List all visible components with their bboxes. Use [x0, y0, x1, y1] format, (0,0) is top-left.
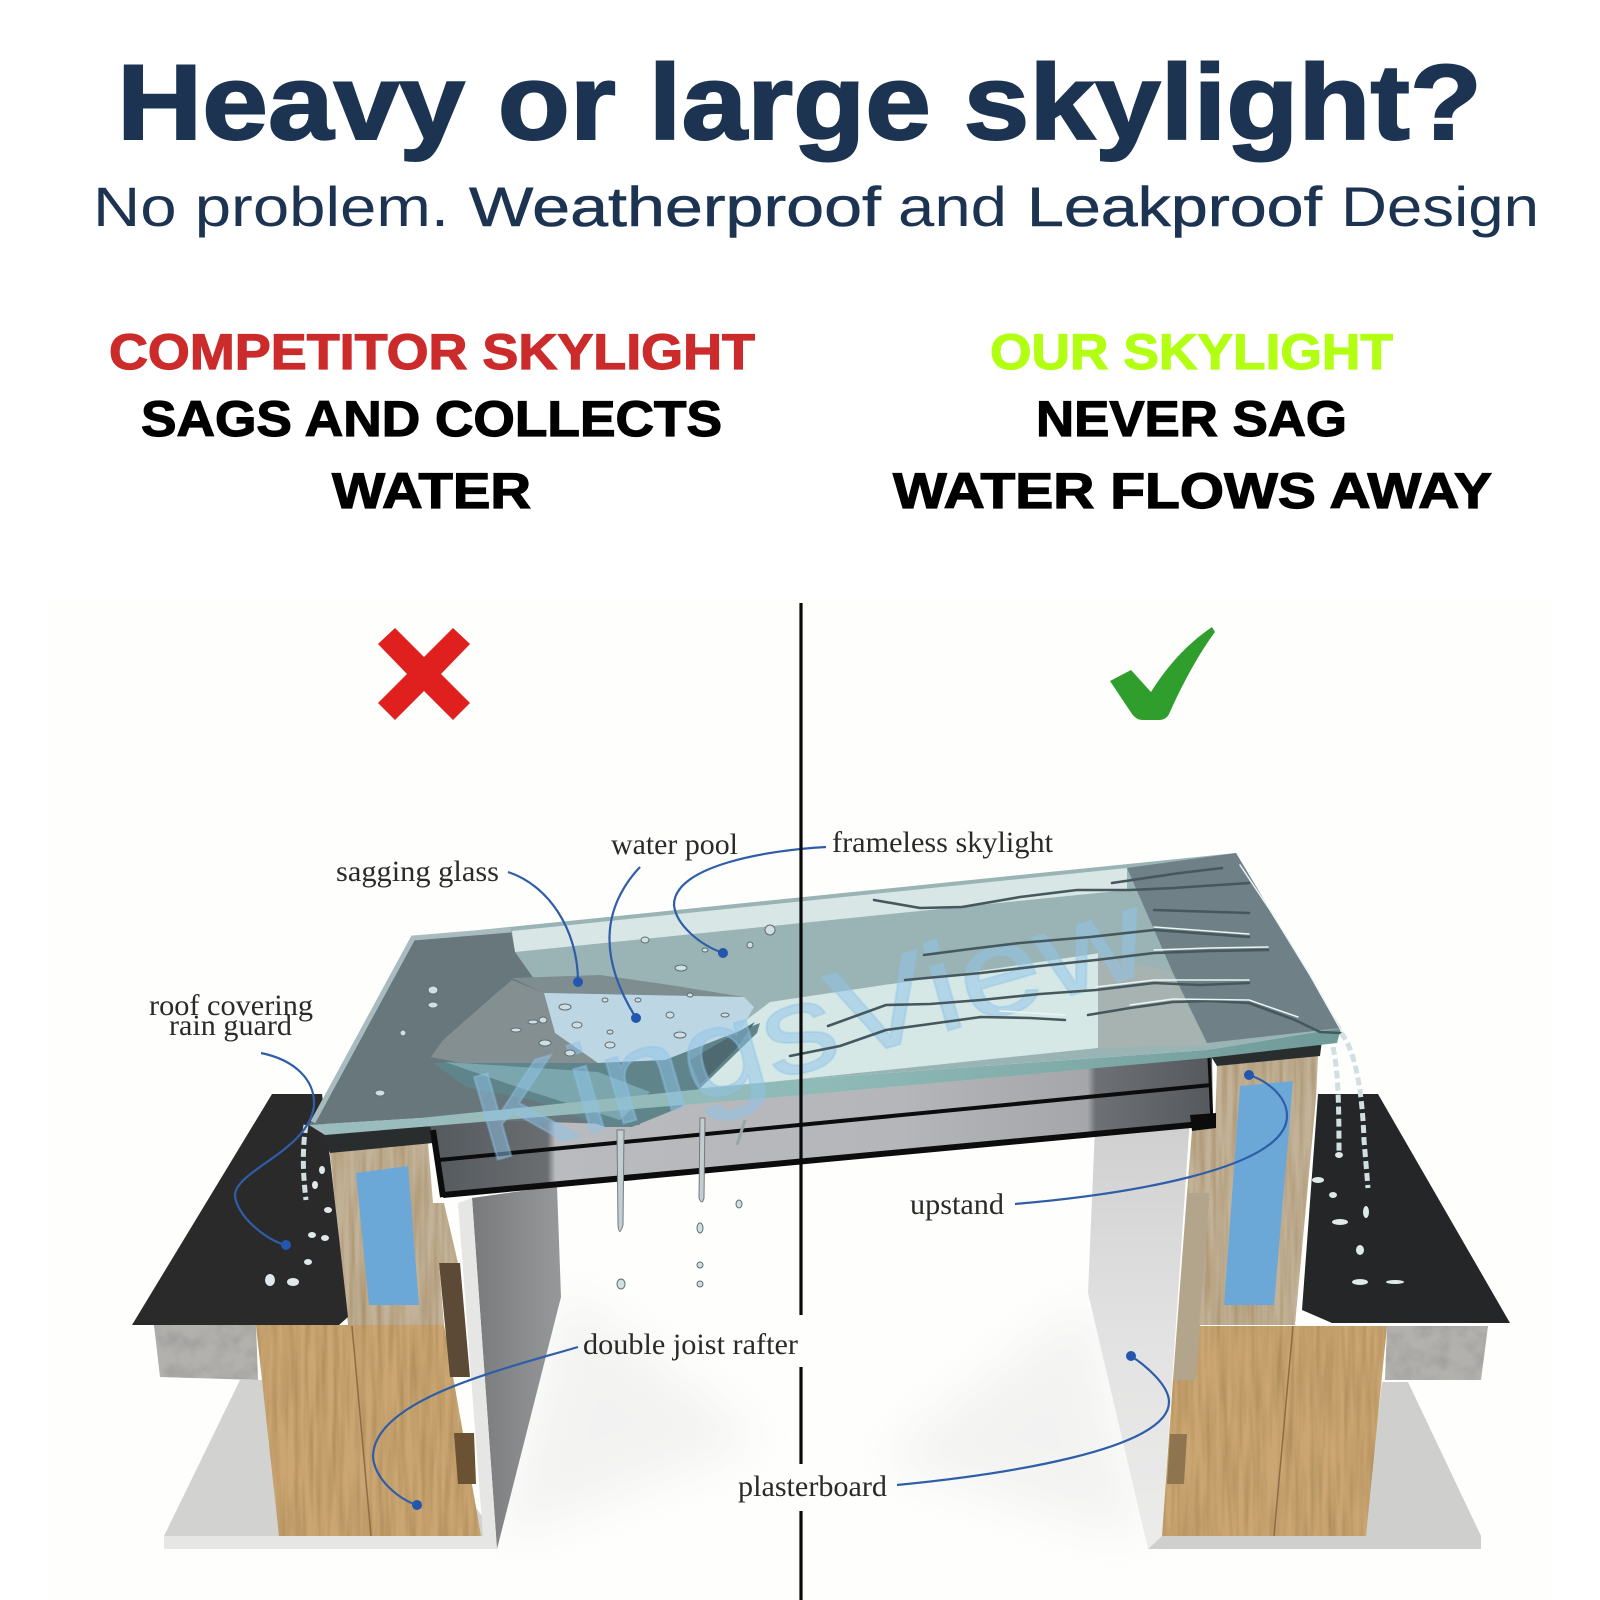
- back glass band: [512, 868, 1127, 952]
- label: roof covering rain guard: roof covering: [149, 989, 313, 1022]
- right dark panel: [1127, 853, 1341, 1043]
- transition strip: [1098, 953, 1207, 1048]
- heading: our skylight: WATER FLOWS AWAY: [893, 463, 1492, 519]
- floor shadows: [500, 1290, 1140, 1540]
- left joist divider: [352, 1326, 371, 1536]
- black pane lines: [433, 1058, 1216, 1197]
- glass droplets: [375, 925, 775, 1096]
- heading: our skylight: NEVER SAG: [1036, 391, 1347, 447]
- subtitle: No problem.: [93, 175, 449, 238]
- heading: our skylight: [893, 324, 1492, 519]
- label: double joist rafter: double joist rafter: [583, 1328, 798, 1361]
- label: frameless skylight: [674, 826, 1054, 958]
- right floor plate: [1148, 1382, 1481, 1549]
- label: roof covering rain guard: rain guard: [169, 1009, 292, 1042]
- right joist rafter: [1162, 1326, 1387, 1536]
- label: sagging glass: [336, 855, 583, 987]
- label: upstand: upstand: [910, 1188, 1004, 1221]
- label: water pool: water pool: [611, 828, 738, 861]
- right roof waterfall: [1312, 1033, 1404, 1285]
- subtitle: and: [898, 175, 1007, 238]
- skylight cross-section diagram: [132, 826, 1510, 1549]
- left dark panel: [309, 930, 640, 1125]
- subtitle: Design: [1341, 175, 1539, 238]
- left dark gap above upstand: [322, 1126, 433, 1153]
- sagging water pool: [431, 975, 760, 1127]
- subtitle: [93, 175, 1539, 238]
- right wall: [1088, 1118, 1190, 1549]
- heading: our skylight: OUR SKYLIGHT: [990, 324, 1393, 380]
- lower light surface: [660, 953, 1100, 1092]
- subtitle: Weatherproof: [469, 175, 882, 238]
- icon: red cross: [378, 628, 470, 720]
- label: plasterboard: plasterboard: [738, 1470, 887, 1503]
- left floor plate: [164, 1380, 497, 1549]
- heading: competitor skylight: [109, 324, 755, 519]
- left gray wall: [472, 1186, 561, 1549]
- heading: competitor skylight: WATER: [332, 463, 531, 519]
- right insulation: [1224, 1081, 1293, 1305]
- label: roof covering rain guard: [149, 989, 314, 1250]
- subtitle: Leakproof: [1027, 175, 1323, 238]
- label: water pool: [609, 828, 738, 1023]
- left concrete: [154, 1325, 258, 1380]
- glass front edge: [309, 1028, 1341, 1135]
- glass underside: [430, 1055, 1213, 1193]
- water streaks: [790, 865, 1341, 1056]
- comparison divider line: [799, 603, 803, 1600]
- label: upstand: [910, 1070, 1287, 1221]
- glass bevel edge: [313, 930, 511, 1122]
- right lower notch: [1167, 1434, 1187, 1484]
- watermark: KingsView: [455, 864, 1162, 1189]
- right upstand timber: [1187, 1056, 1318, 1325]
- right upper notch: [1173, 1193, 1210, 1380]
- left upper notch: [439, 1263, 470, 1377]
- left insulation: [356, 1166, 419, 1305]
- drips under sagging glass: [617, 1118, 745, 1289]
- left upstand timber: [330, 1143, 458, 1325]
- heading: competitor skylight: COMPETITOR SKYLIGHT: [109, 324, 755, 380]
- title: Heavy or large skylight?: [117, 42, 1482, 162]
- right concrete: [1385, 1326, 1488, 1380]
- right dark gap above upstand: [1207, 1040, 1322, 1066]
- left black roof covering: [132, 1094, 348, 1325]
- label: frameless skylight: frameless skylight: [832, 826, 1054, 859]
- right black roof covering: [1302, 1094, 1510, 1323]
- label: plasterboard: [738, 1351, 1169, 1503]
- left joist rafter: [256, 1325, 481, 1536]
- glass top surface base: [309, 853, 1341, 1125]
- icon: green check: [1110, 627, 1215, 720]
- right joist divider: [1274, 1326, 1293, 1536]
- left plasterboard strip: [164, 1198, 497, 1549]
- label: sagging glass: sagging glass: [336, 855, 499, 888]
- heading: competitor skylight: SAGS AND COLLECTS: [141, 391, 722, 447]
- label: double joist rafter: [373, 1328, 798, 1510]
- left roof runoff: [265, 1125, 332, 1286]
- left lower notch: [454, 1433, 476, 1484]
- diagram panel background: [48, 600, 1552, 1600]
